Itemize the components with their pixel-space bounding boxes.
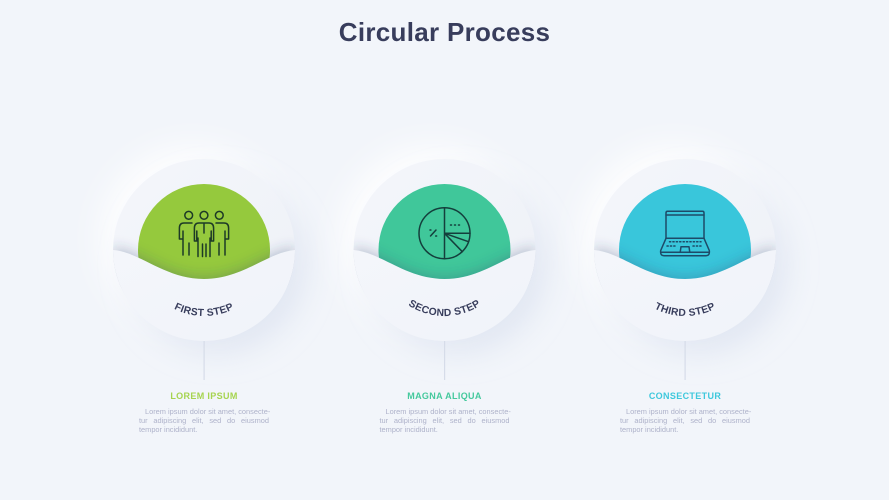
text block: step 2: tempor incididunt. bbox=[380, 425, 438, 434]
icon: pie chart bbox=[419, 208, 470, 259]
text block: step 1: tempor incididunt. bbox=[139, 425, 197, 434]
text block: step 3 bbox=[620, 406, 751, 434]
icon: laptop bbox=[661, 211, 709, 256]
connector 1 bbox=[204, 341, 205, 380]
step label: THIRD STEP bbox=[656, 302, 714, 316]
step 1 circle bbox=[112, 158, 306, 353]
text block: step 3: tur adipiscing elit, sed do eiusmod bbox=[620, 416, 750, 425]
connector 3 bbox=[684, 341, 686, 380]
text block: step 3: Lorem ipsum dolor sit amet, consecte- bbox=[626, 406, 751, 416]
text block: step 1 bbox=[139, 406, 270, 434]
text block: step 3: tempor incididunt. bbox=[620, 425, 678, 434]
heading: lorem ipsum: LOREM IPSUM bbox=[170, 391, 238, 401]
heading: consectetur: CONSECTETUR bbox=[649, 391, 721, 401]
text block: step 1: Lorem ipsum dolor sit amet, consecte- bbox=[145, 406, 270, 416]
diagram: three circular steps bbox=[112, 158, 787, 380]
step 2 circle bbox=[353, 158, 546, 353]
text block: step 2: Lorem ipsum dolor sit amet, consecte- bbox=[386, 406, 511, 416]
step label: SECOND STEP bbox=[409, 300, 478, 316]
title: Circular Process bbox=[339, 17, 550, 47]
step label: FIRST STEP bbox=[174, 302, 232, 316]
text block: step 2: tur adipiscing elit, sed do eiusmod bbox=[380, 416, 510, 425]
text block: step 1: tur adipiscing elit, sed do eiusmod bbox=[139, 416, 269, 425]
connector 2 bbox=[444, 341, 445, 380]
step 3 circle bbox=[594, 158, 787, 353]
text block: step 2 bbox=[380, 406, 511, 434]
heading: magna aliqua: MAGNA ALIQUA bbox=[407, 391, 482, 401]
icon: three people bbox=[179, 211, 229, 256]
